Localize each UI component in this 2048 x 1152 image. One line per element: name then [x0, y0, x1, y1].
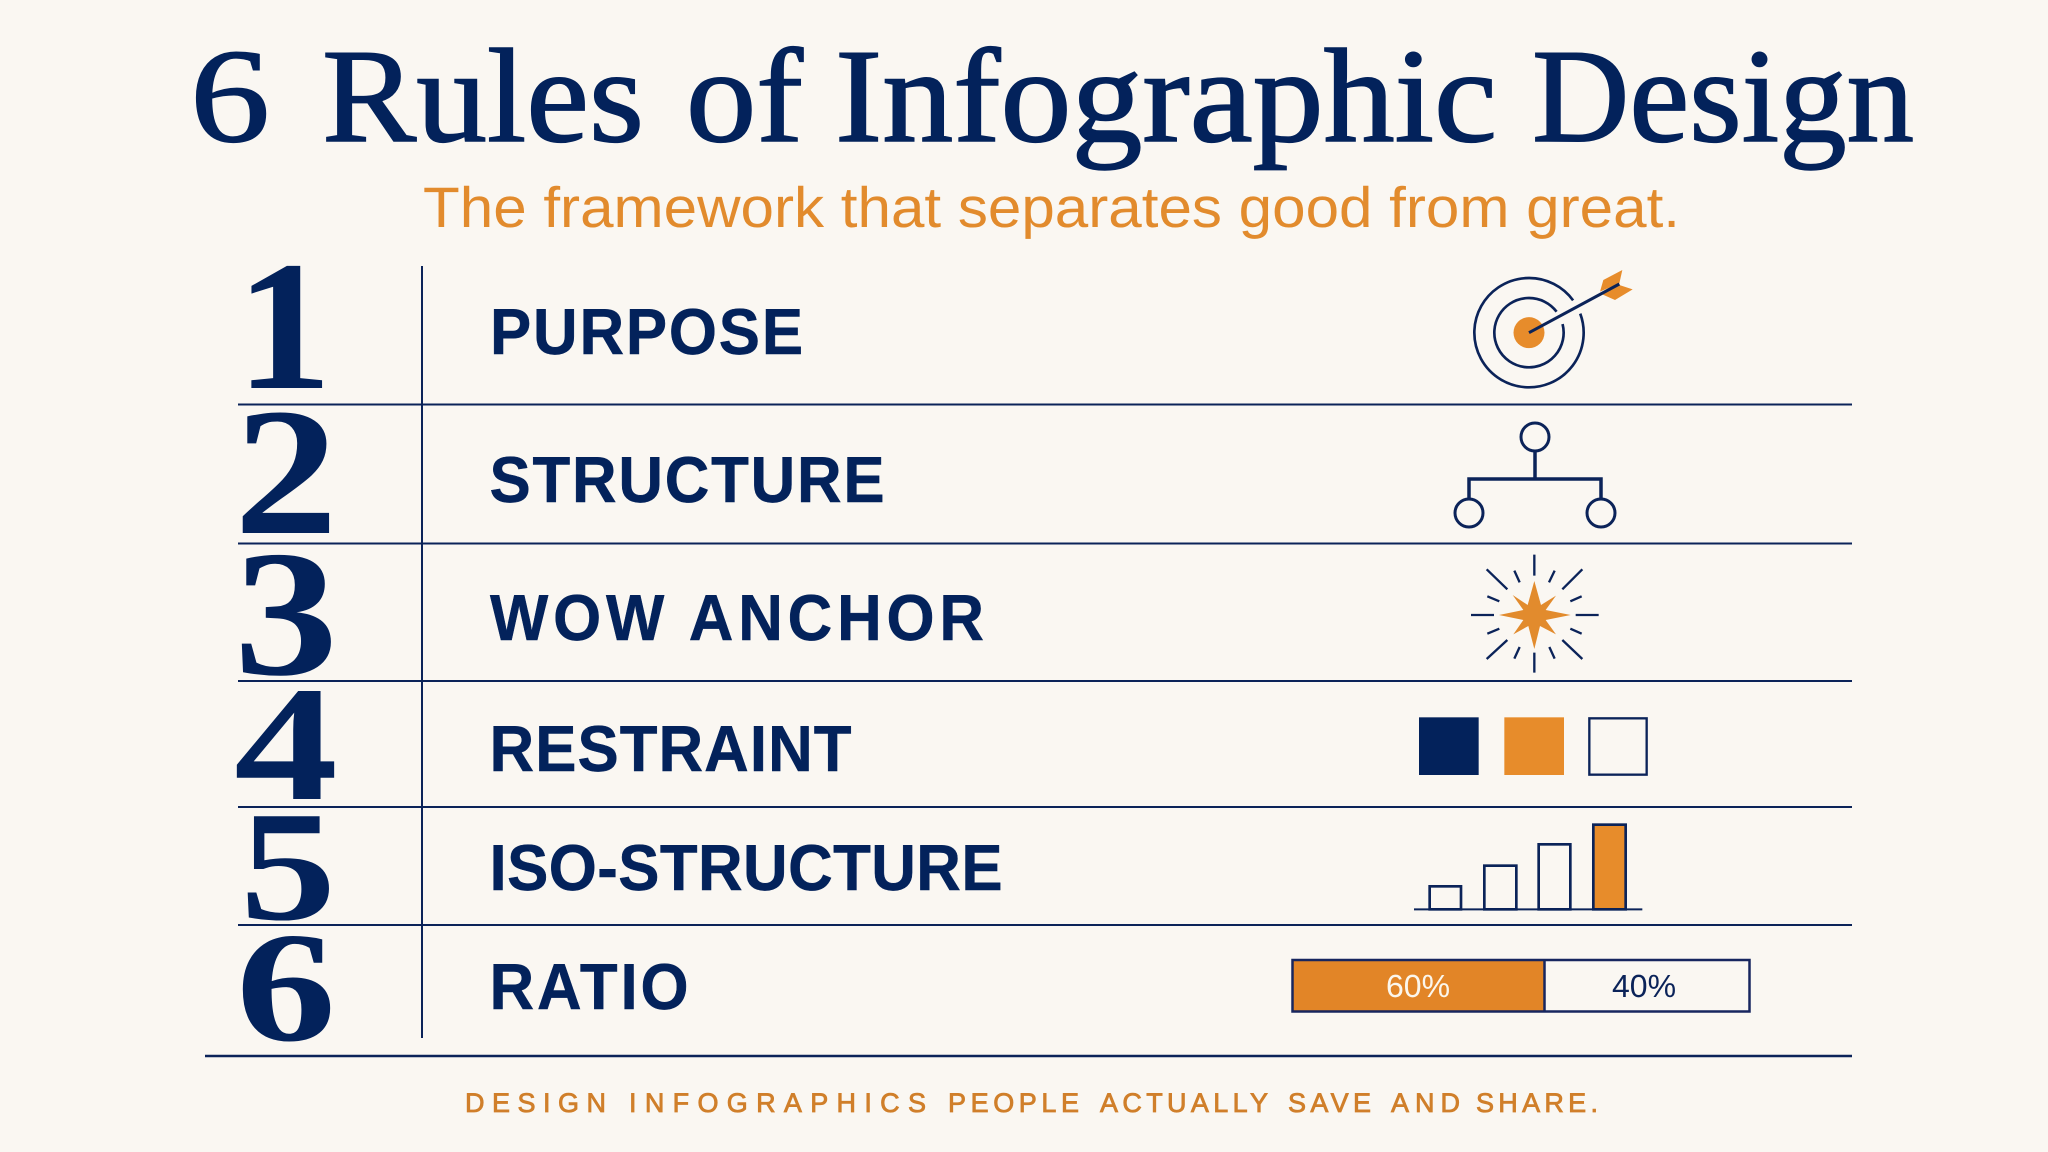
icon: colour squares	[1419, 717, 1647, 775]
footer tagline: DESIGN	[465, 1088, 606, 1118]
title: 6	[190, 22, 270, 170]
row 5: iso-structure	[240, 779, 1642, 953]
title: Rules	[322, 22, 644, 170]
footer tagline: SHARE.	[1476, 1088, 1598, 1118]
title: Infographic	[835, 22, 1497, 170]
footer tagline	[465, 1088, 1598, 1118]
footer tagline: INFOGRAPHICS	[629, 1088, 926, 1118]
title: of	[686, 22, 803, 170]
row 6: ratio	[236, 900, 1750, 1074]
footer tagline: ACTUALLY	[1100, 1088, 1268, 1118]
label: wow anchor: WOW ANCHOR	[490, 581, 984, 654]
label: purpose: PURPOSE	[490, 295, 803, 368]
icon: starburst	[1471, 555, 1599, 673]
label: structure: STRUCTURE	[490, 443, 885, 516]
ratio bar 60/40	[1292, 960, 1750, 1012]
icon: bar chart	[1414, 825, 1642, 909]
title: Design	[1532, 22, 1914, 170]
number 3: 3	[234, 514, 338, 713]
row 4: restraint	[234, 654, 1647, 835]
icon: hierarchy	[1455, 423, 1615, 527]
footer tagline: PEOPLE	[948, 1088, 1079, 1118]
40% label: 40%	[1612, 968, 1676, 1004]
row 1: purpose	[236, 224, 1633, 429]
row 3: wow anchor	[234, 514, 1599, 713]
label: iso-structure: ISO-STRUCTURE	[490, 831, 1003, 904]
number 1: 1	[236, 224, 332, 429]
number 4: 4	[234, 654, 338, 835]
footer tagline: AND	[1391, 1088, 1460, 1118]
table rules	[205, 266, 1852, 1056]
number 6: 6	[236, 900, 336, 1074]
label: restraint: RESTRAINT	[490, 712, 851, 785]
icon: target with arrow	[1474, 270, 1633, 387]
subtitle: The framework that separates good from great.	[423, 176, 1680, 240]
number 2: 2	[234, 372, 338, 573]
label: ratio: RATIO	[490, 950, 689, 1023]
title	[190, 22, 1914, 170]
row 2: structure	[234, 372, 1615, 573]
number 5: 5	[240, 779, 336, 953]
footer tagline: SAVE	[1288, 1088, 1371, 1118]
60% label: 60%	[1386, 968, 1450, 1004]
